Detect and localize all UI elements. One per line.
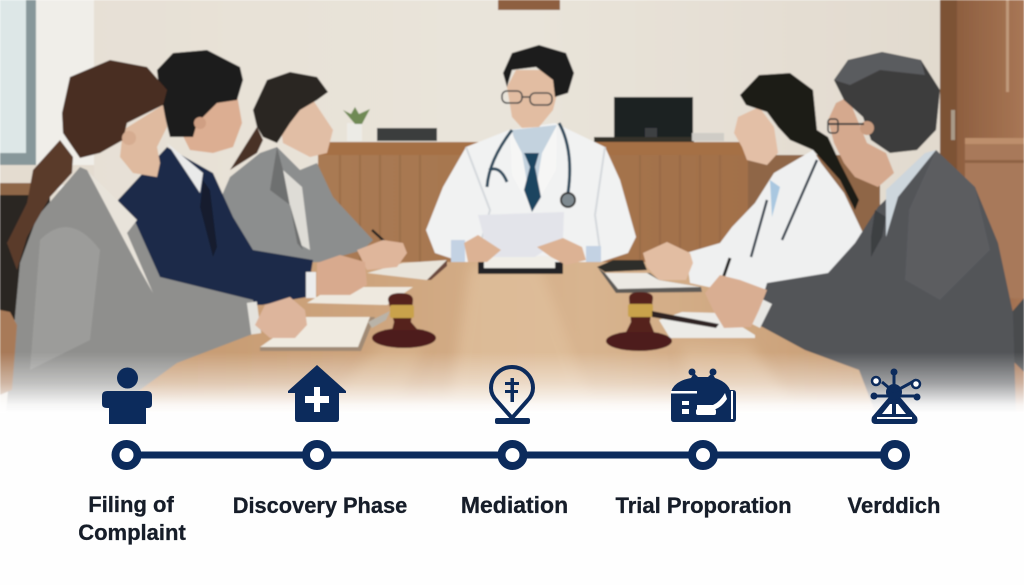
icon: map pin with cross: [491, 367, 533, 424]
centre doctor: [426, 45, 636, 274]
conference table: [70, 262, 930, 412]
plant: [343, 107, 370, 141]
back wall: [0, 0, 1024, 412]
wooden door panel: [940, 0, 1024, 412]
chair, left edge: [0, 310, 17, 395]
man in grey suit: [705, 52, 1016, 412]
label: Trial Proporation: Trial Proporation: [615, 493, 792, 518]
label: Filing of Complaint: Complaint: [78, 520, 186, 545]
white lower band: [0, 413, 1024, 585]
label: Mediation: Mediation: [461, 492, 568, 518]
documents on right of table: [597, 260, 755, 338]
window: [0, 0, 94, 320]
label: Verddich: Verddich: [848, 493, 940, 518]
timeline: [116, 444, 906, 466]
label: Discovery Phase: Discovery Phase: [233, 493, 407, 518]
node 1: [116, 444, 138, 466]
white fade into timeline area: [0, 352, 1024, 414]
back bench: [318, 142, 880, 264]
monitor: [594, 97, 724, 142]
icon: trial case: [671, 368, 736, 422]
left wall column: [33, 0, 94, 190]
node 4: [692, 444, 714, 466]
wall plaque: [498, 0, 560, 10]
icon: flask network: [870, 368, 920, 424]
label: Filing of Complaint: Filing of: [88, 492, 174, 517]
node 3: [502, 444, 524, 466]
right chair: [1012, 298, 1024, 372]
woman in grey, front: [6, 60, 307, 412]
gavel, left: [372, 293, 436, 348]
woman doctor: [643, 73, 880, 290]
node 5: [884, 444, 906, 466]
gavel, right: [606, 292, 719, 351]
dark box on bench: [377, 128, 437, 141]
woman in grey, back: [215, 72, 407, 270]
icon: person: [102, 368, 152, 424]
timeline line: [126, 452, 896, 458]
man in navy suit: [118, 50, 367, 305]
documents on left of table: [260, 260, 447, 351]
meeting room photo: [0, 0, 1024, 412]
node 2: [306, 444, 328, 466]
icon: house with cross: [288, 365, 346, 422]
